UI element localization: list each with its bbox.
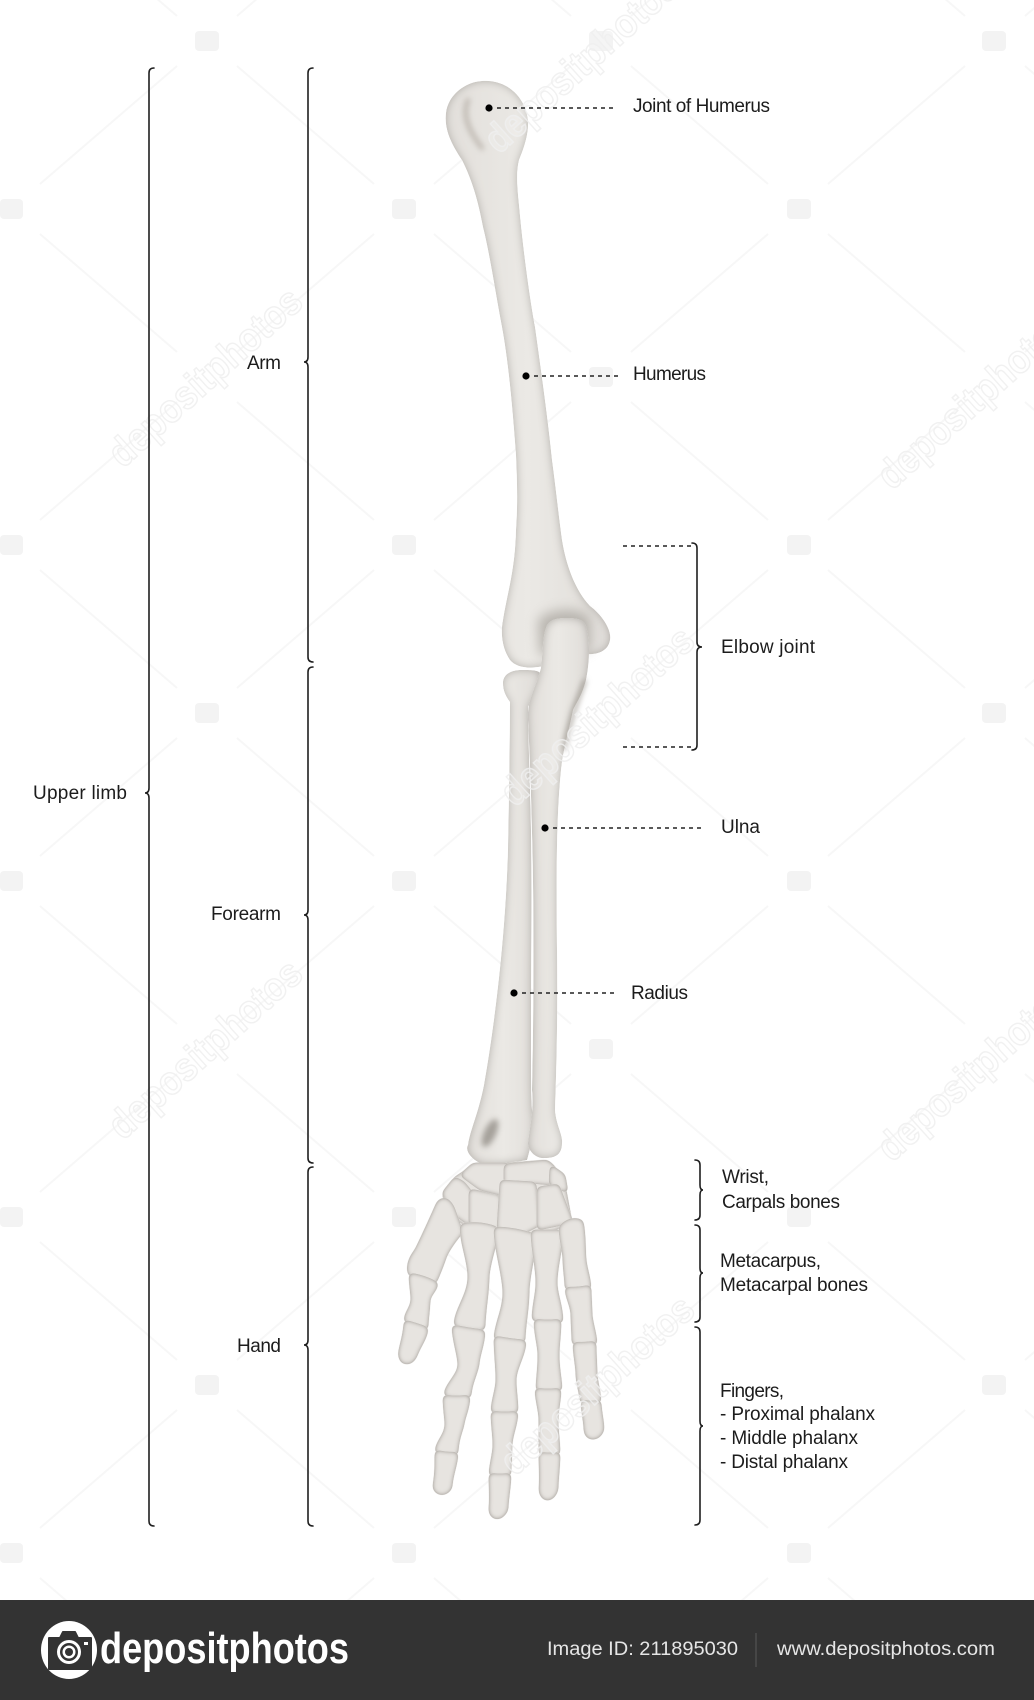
callout: fingers: - Middle phalanx (720, 1428, 858, 1449)
bracket group: hand (237, 1167, 313, 1526)
bracket group: forearm (211, 667, 313, 1163)
callout: humerus (522, 364, 706, 385)
label: Upper limb: Upper limb (33, 783, 127, 804)
footer band (0, 1600, 1034, 1700)
watermark text: depositphotos (100, 279, 311, 476)
callout: joint of humerus (485, 96, 770, 117)
callout: metacarpus: Metacarpal bones (720, 1275, 868, 1296)
callout: ulna (541, 817, 760, 838)
callout: fingers: Fingers, (720, 1381, 784, 1402)
callout: radius: Radius (631, 983, 688, 1004)
watermark text (100, 0, 1034, 1484)
website url: www.depositphotos.com (776, 1639, 995, 1660)
callout: ulna: Ulna (721, 817, 760, 838)
label: Arm: Arm (247, 353, 281, 374)
label: Hand: Hand (237, 1336, 281, 1357)
icon: camera logo (41, 1621, 97, 1679)
callout: radius (510, 983, 688, 1004)
watermark text: depositphotos (492, 1287, 703, 1484)
callout: fingers: - Distal phalanx (720, 1452, 848, 1473)
callout: fingers: - Proximal phalanx (720, 1404, 876, 1425)
callout: wrist carpals: Carpals bones (722, 1192, 840, 1213)
bones: ring finger (532, 1231, 562, 1499)
callout: fingers (695, 1327, 876, 1525)
bone: ulna (528, 618, 589, 1158)
bracket group: upper limb (33, 68, 154, 1526)
bones: middle finger (490, 1228, 535, 1518)
bones: wrist carpals (443, 1161, 572, 1240)
callout: wrist carpals (695, 1160, 840, 1220)
bones: little finger (560, 1219, 603, 1438)
bone: radius (467, 670, 540, 1164)
callout: metacarpus: Metacarpus, (720, 1251, 821, 1272)
bones: index finger (434, 1224, 497, 1494)
watermark text: depositphotos (492, 618, 703, 815)
label: Forearm: Forearm (211, 904, 281, 925)
illustration: arm skeleton (399, 81, 610, 1518)
bracket group: arm (247, 68, 313, 662)
bone: humerus (446, 81, 610, 668)
bones: thumb-side finger (399, 1199, 462, 1363)
callout: humerus: Humerus (633, 364, 706, 385)
callout: metacarpus (695, 1225, 868, 1322)
watermark text: depositphotos (100, 951, 311, 1148)
callout: elbow joint (623, 543, 816, 750)
image id: Image ID: 211895030 (547, 1639, 738, 1660)
callout: wrist carpals: Wrist, (722, 1167, 769, 1188)
logo wordmark: depositphotos (100, 1624, 349, 1673)
callout: joint of humerus: Joint of Humerus (633, 96, 770, 117)
callout: elbow joint: Elbow joint (721, 637, 816, 658)
